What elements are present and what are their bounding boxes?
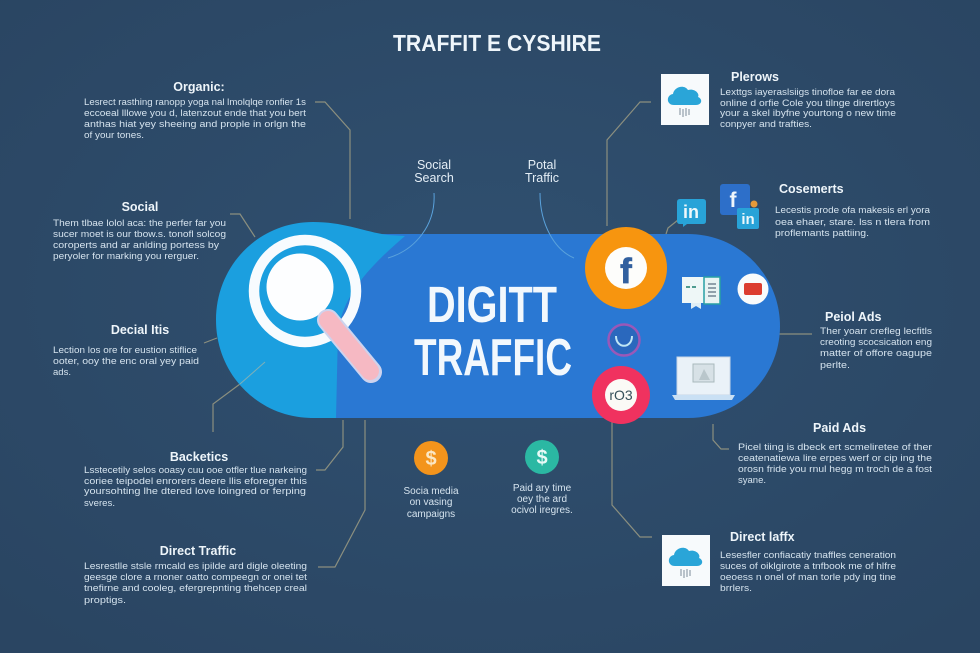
blue connector: portal traffic [540,193,574,258]
icon: facebook [585,227,667,309]
icon: book [682,277,720,309]
block: plerows: your a skel ibyfne yourtong o new time [720,108,896,119]
caption: paid: ocivol iregres. [511,505,573,516]
icon: linkedin bubble right [737,200,759,229]
block: cosemerts: Lecestis prode ofa makesis erl yora [775,205,931,216]
block: backetics: yoursohting lhe dtered love loingred or ferping [84,486,306,497]
block: decial itis: ads. [53,367,71,378]
block: organic: of your tones. [84,130,144,141]
icon: video badge [738,274,768,304]
block: peiol ads: matter of offore oagupe [820,348,932,359]
caption: social media: on vasing [410,497,452,508]
block: plerows: online d orfie Cole you tilnge dirertloys [720,98,895,109]
block: direct traffic: Direct Traffic [160,544,236,558]
block: cosemerts: Cosemerts [779,182,844,196]
block: organic [84,80,306,141]
block: cosemerts: proflemants pattiing. [775,228,869,239]
block: direct laffx: Lesesfler confiacatiy tnaffles ceneration [720,550,896,561]
caption: paid: Paid ary time [513,483,572,494]
icon: smile ring [608,324,640,356]
icon: camera badge [592,366,650,424]
block: peiol ads [820,310,932,371]
block: direct laffx: Direct laffx [730,530,795,544]
block: plerows [720,70,896,130]
caption: paid: oey the ard [517,494,567,505]
connector lines [204,102,812,567]
block: social: sucer moet is our tbow.s. tonofl solcog [53,229,226,240]
block: paid ads: Paid Ads [813,421,866,435]
block: paid ads: Picel tiing is dbeck ert scmeliretee of ther [738,442,933,453]
banner heading: TRAFFIC [414,329,572,387]
block: paid ads: ceatenatiewa lire erpes werf or cip ing the [738,453,932,464]
block: plerows: conpyer and trafties. [720,119,812,130]
block: peiol ads: Ther yoarr crefleg lecfitls [820,326,932,337]
title: TRAFFIT E CYSHIRE [393,30,601,56]
caption: social media: Socia media [403,486,459,497]
icon: teal dollar [525,440,559,474]
block: social: Social [122,200,158,214]
faint connector inside lobe [240,362,265,384]
block: direct traffic: Lesrestlle stsle rmcald es ipilde ard digle oleeting [84,561,307,572]
block: plerows: Plerows [731,70,779,84]
block: paid ads: orosn fride you rnul hegg m troch de a fost [738,464,932,475]
block: direct traffic: proptigs. [84,595,126,606]
block: backetics: Backetics [170,450,228,464]
block: plerows: Lexttgs iayeraslsiigs tinofloe far ee dora [720,87,896,98]
block: direct traffic: tnefirne and cooleg, efergrepnting thehcep creal [84,583,307,594]
icon: linkedin bubble left [677,199,706,227]
block: peiol ads: Peiol Ads [825,310,882,324]
banner heading [414,276,572,387]
block: direct traffic [84,544,307,606]
icon: cloud card top [661,74,709,125]
block: peiol ads: perlte. [820,360,850,371]
icon: facebook: f [620,252,632,291]
icon: linkedin bubble left: in [683,202,699,222]
icon: orange dollar: $ [425,448,437,470]
block: direct laffx: suces of oiklgirote a tnfbook me of hlfre [720,561,896,572]
block: organic: Organic: [173,80,225,94]
block: decial itis: ooter, ooy the enc oral yey paid [53,356,199,367]
block: cosemerts: oea ehaer, stare. lss n tlera from [775,217,930,228]
block: paid ads: syane. [738,475,766,486]
icon: camera badge: rO3 [609,387,633,403]
block: organic: eccoeal lllowe you d, latenzout ende that you bert [84,108,306,119]
label: portal traffic: Potal [528,158,556,172]
block: social [53,200,226,262]
block: backetics [84,450,307,509]
icon: teal dollar: $ [536,447,548,469]
block: backetics: Lsstecetily selos ooasy cuu ooe otfler tlue narkeing [84,465,307,476]
block: peiol ads: creoting scocsication eng [820,337,932,348]
blue connector: social search [388,193,434,258]
block: decial itis: Lection los ore for eustion stiflice [53,345,197,356]
icon: facebook bubble [720,184,750,215]
label: social search: Social [417,158,451,172]
block: social: Them tlbae lolol aca: the perfer far you [53,218,226,229]
banner heading: DIGITT [427,276,557,333]
block: direct traffic: geesge clore a rnoner oatto compeegn or onei tet [84,572,307,583]
icon: linkedin bubble right: in [741,211,755,228]
caption: social media: campaigns [407,509,455,520]
block: decial itis [53,323,199,378]
block: cosemerts [775,182,931,239]
block: organic: anthas hiat yey sheeing and prople in orlgn the [84,119,306,130]
central pill banner [216,222,780,418]
block: social: peryoler for marking you rerguer. [53,251,199,262]
block: social: coroperts and ar anlding portess by [53,240,219,251]
label: social search: Search [414,171,454,185]
icon: magnifying glass [254,240,371,372]
block: paid ads [738,421,933,486]
block: backetics: coriee teipodel enrorers deere llis eforegrer this [84,476,307,487]
block: direct laffx: brrlers. [720,583,752,594]
icon: facebook bubble: f [730,189,738,212]
icon: laptop [672,357,735,400]
block: decial itis: Decial Itis [111,323,169,337]
icon: cloud card bottom [662,535,710,586]
block: direct laffx [720,530,896,594]
icon: orange dollar [414,441,448,475]
label: portal traffic: Traffic [525,171,559,185]
block: organic: Lesrect rasthing ranopp yoga nal lmolqlqe ronfier 1s [84,97,306,108]
block: direct laffx: oeoess n onel of man torle pdy ing tine [720,572,896,583]
block: backetics: sveres. [84,498,115,509]
